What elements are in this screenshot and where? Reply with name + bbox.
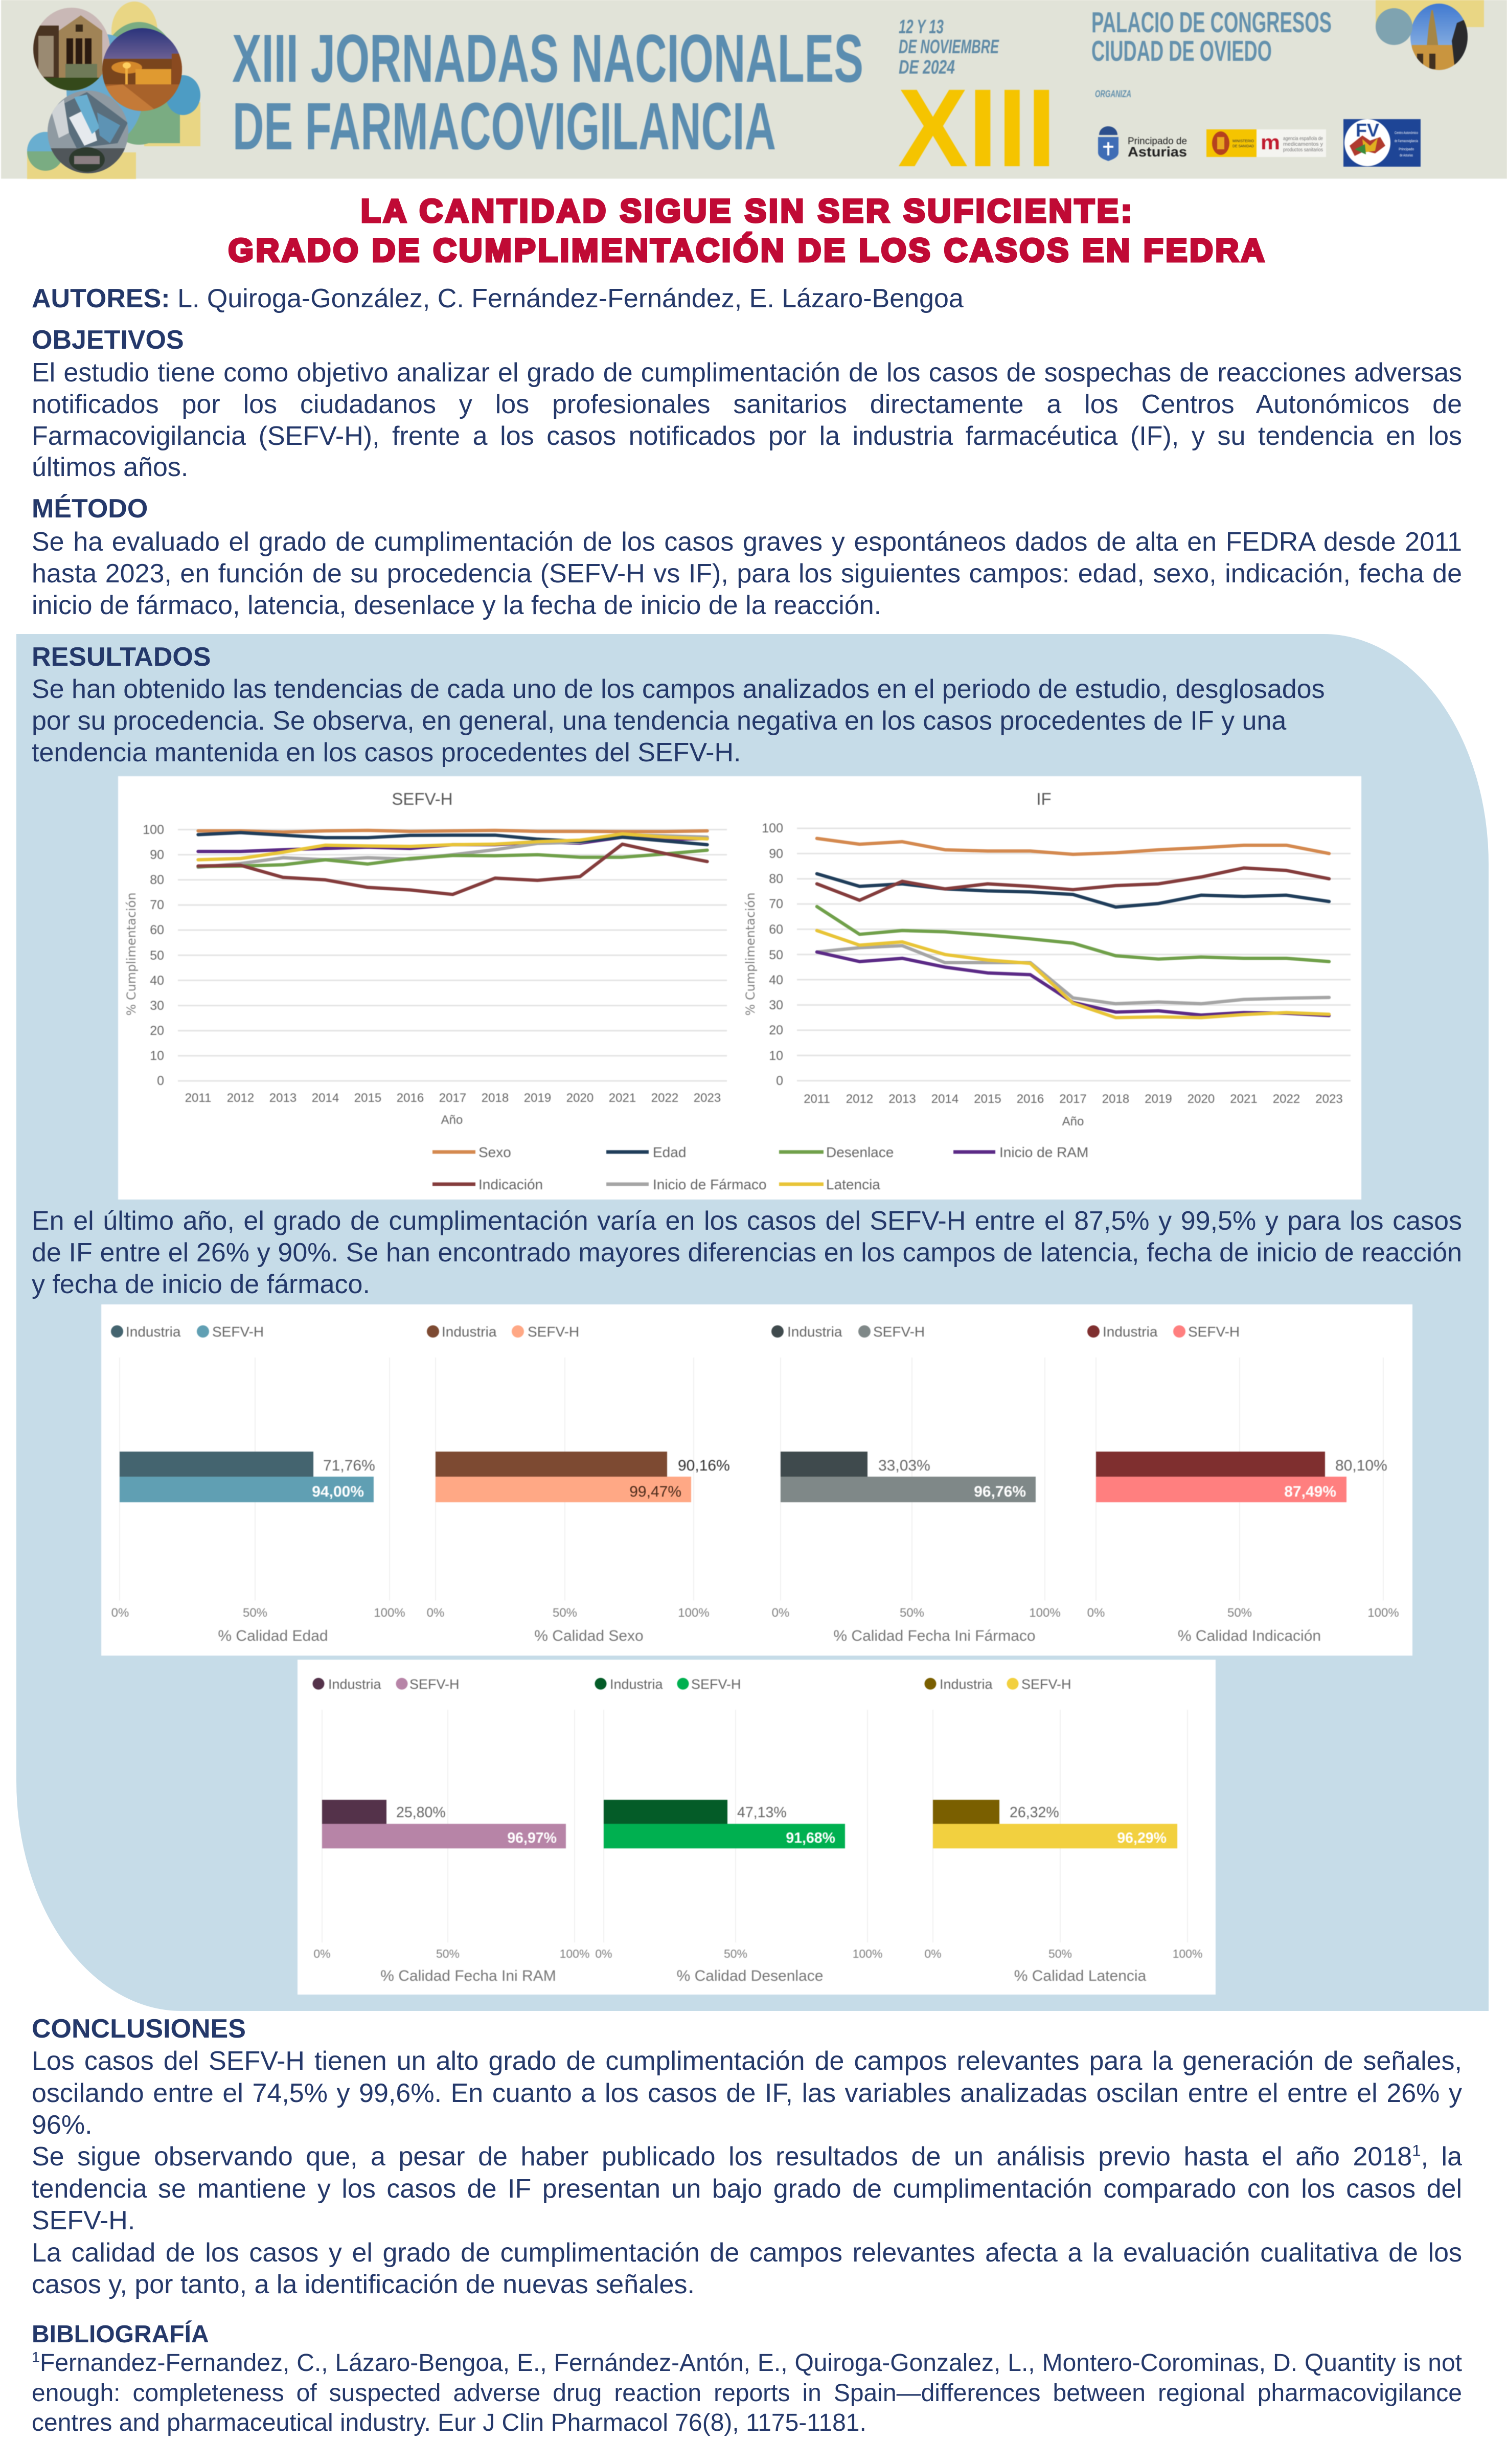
title: LA CANTIDAD SIGUE SIN SER SUFICIENTE:: [361, 193, 1134, 229]
heading: conclusiones: CONCLUSIONES: [32, 2014, 246, 2044]
line chart: IF: 2021: [1230, 1092, 1258, 1106]
right decorative photo: [1376, 0, 1484, 72]
bar chart: % Calidad Desenlace: 50%: [724, 1947, 747, 1960]
line chart: IF: IF: [1036, 789, 1052, 808]
bar chart: % Calidad Desenlace: 47,13%: [737, 1804, 787, 1821]
bar chart: % Calidad Fecha Ini RAM: 50%: [436, 1947, 460, 1960]
bar charts panel: upper row: [101, 1304, 1413, 1656]
bar charts panel: lower row: [298, 1660, 1216, 1995]
line chart legend: Sexo: [478, 1144, 511, 1160]
line chart: SEFV-H: SEFV-H: [392, 789, 453, 808]
section: conclusiones: [32, 2013, 1462, 2300]
text: conclusiones: SEFV-H.: [32, 2206, 135, 2235]
bar chart: % Calidad Fecha Ini RAM: Industria: [328, 1677, 382, 1692]
line chart: SEFV-H: % Cumplimentación: [124, 893, 139, 1015]
bar chart: % Calidad Sexo: [427, 1324, 730, 1644]
text: conclusiones: oscilando entre el 74,5% y 99,6%. En cuanto a los casos de IF, las variables analizadas oscilan entre el entre el 26% y: [32, 2078, 1462, 2108]
bar chart: % Calidad Edad: 71,76%: [323, 1457, 375, 1474]
line chart: SEFV-H: 40: [150, 974, 164, 988]
bar chart: % Calidad Latencia: Industria: [940, 1677, 993, 1692]
line chart: SEFV-H: 30: [150, 999, 164, 1013]
bar chart: % Calidad Edad: 94,00%: [312, 1483, 364, 1500]
heading: método: MÉTODO: [32, 494, 148, 524]
line charts panel: SEFV-H and IF trends: [118, 776, 1362, 1200]
bar chart: % Calidad Fecha Ini Fármaco: 50%: [900, 1606, 924, 1620]
main heading: XIII Jornadas Nacionales de Farmacovigilancia: [232, 21, 863, 164]
bar chart: % Calidad Indicación: % Calidad Indicación: [1178, 1627, 1321, 1644]
bar chart: % Calidad Fecha Ini Fármaco: SEFV-H: [873, 1324, 925, 1340]
line chart legend: Edad: [653, 1144, 686, 1160]
bar chart: % Calidad Desenlace: 0%: [595, 1947, 612, 1960]
bar chart: % Calidad Desenlace: [595, 1677, 882, 1984]
line chart: IF: 2014: [931, 1092, 958, 1106]
line chart: IF: 2011: [804, 1092, 830, 1106]
bar chart: % Calidad Fecha Ini RAM: % Calidad Fecha Ini RAM: [380, 1968, 556, 1984]
bar chart: % Calidad Indicación: 100%: [1367, 1606, 1399, 1620]
bar chart: % Calidad Edad: 0%: [111, 1606, 129, 1620]
main heading: XIII Jornadas Nacionales de Farmacovigilancia: XIII JORNADAS NACIONALES: [232, 21, 863, 97]
section: objetivos: [32, 325, 1462, 482]
venue: [1091, 6, 1332, 67]
line chart: IF: 50: [769, 948, 783, 962]
bar chart: % Calidad Edad: Industria: [126, 1324, 181, 1340]
venue: PALACIO DE CONGRESOS: [1091, 6, 1332, 39]
line chart: IF: 2023: [1315, 1092, 1343, 1106]
bar chart: % Calidad Latencia: [924, 1677, 1202, 1984]
section: método: [32, 494, 1462, 620]
title: GRADO DE CUMPLIMENTACIÓN DE LOS CASOS EN FEDRA: [229, 233, 1267, 268]
logo: Principado de Asturias: Asturias: [1128, 144, 1187, 160]
bar chart: % Calidad Latencia: 96,29%: [1117, 1830, 1167, 1846]
bar chart: % Calidad Latencia: 50%: [1048, 1947, 1072, 1960]
text: conclusiones: 96%.: [32, 2110, 93, 2140]
line chart legend: Inicio de RAM: [999, 1144, 1088, 1160]
authors: AUTORES: L. Quiroga-González, C. Fernández-Fernández, E. Lázaro-Bengoa: [32, 284, 964, 313]
title: [228, 193, 1267, 268]
bar chart: % Calidad Fecha Ini RAM: 100%: [560, 1947, 589, 1960]
bar chart: % Calidad Indicación: 0%: [1087, 1606, 1105, 1620]
bar chart: % Calidad Sexo: 50%: [553, 1606, 577, 1620]
line chart: SEFV-H: 0: [157, 1074, 164, 1088]
line chart legend: Inicio de Fármaco: [653, 1177, 767, 1192]
logo: Ministerio de Sanidad and AEMPS: medicamentos y: [1283, 142, 1323, 147]
logo: FV: Centro Autonómico: [1395, 131, 1418, 135]
logo: Ministerio de Sanidad and AEMPS: productos sanitarios: [1283, 147, 1323, 153]
line chart: IF: 2015: [974, 1092, 1001, 1106]
bar chart: % Calidad Fecha Ini Fármaco: 96,76%: [974, 1483, 1026, 1500]
bar chart: % Calidad Indicación: 87,49%: [1284, 1483, 1336, 1500]
bar chart: % Calidad Edad: % Calidad Edad: [218, 1627, 328, 1644]
text: resultados intro: [32, 674, 1325, 767]
line chart: IF: 2016: [1017, 1092, 1044, 1106]
line chart: SEFV-H: 2014: [312, 1091, 339, 1105]
line chart: IF: 2018: [1102, 1092, 1129, 1106]
bar chart: % Calidad Edad: 100%: [374, 1606, 405, 1620]
bar chart: % Calidad Sexo: SEFV-H: [528, 1324, 579, 1340]
line chart: SEFV-H: 2012: [227, 1091, 254, 1105]
logo: Ministerio de Sanidad and AEMPS: m: [1261, 131, 1280, 154]
line chart: IF: 70: [769, 897, 783, 911]
bar chart: % Calidad Latencia: % Calidad Latencia: [1014, 1968, 1147, 1984]
bar chart: % Calidad Fecha Ini Fármaco: 0%: [772, 1606, 789, 1620]
text: objetivos: [32, 358, 1462, 482]
bar chart: % Calidad Fecha Ini Fármaco: 33,03%: [878, 1457, 930, 1474]
bar chart: % Calidad Indicación: SEFV-H: [1188, 1324, 1240, 1340]
bar chart: % Calidad Indicación: Industria: [1103, 1324, 1158, 1340]
line chart: SEFV-H: 2020: [566, 1091, 593, 1105]
logo: FV: Principado: [1399, 148, 1414, 151]
bar chart: % Calidad Latencia: 26,32%: [1010, 1804, 1059, 1821]
text: método: [32, 527, 1462, 620]
text: reference: enough: completeness of suspected adverse drug reaction reports in Spain—differences between regional pharmacovigilance: [32, 2380, 1462, 2407]
section: bibliografía: [32, 2319, 1462, 2439]
text: objetivos: Farmacovigilancia (SEFV-H), frente a los casos notificados por la industria farmacéutica (IF), y su tendencia en los: [32, 421, 1462, 451]
dates: DE NOVIEMBRE: [899, 36, 999, 58]
bar chart: % Calidad Desenlace: SEFV-H: [691, 1677, 741, 1692]
bar chart: % Calidad Sexo: 100%: [678, 1606, 710, 1620]
bar chart: % Calidad Desenlace: Industria: [610, 1677, 664, 1692]
logo: FV: de Farmacovigilancia: [1395, 140, 1418, 143]
text: resultados last year: En el último año, el grado de cumplimentación varía en los casos del SEFV-H entre el 87,5% y 99,5% y para los casos: [32, 1206, 1462, 1236]
bar chart: % Calidad Indicación: 50%: [1227, 1606, 1252, 1620]
line chart: IF: 2020: [1188, 1092, 1215, 1106]
line chart: SEFV-H: 2017: [439, 1091, 466, 1105]
bar chart: % Calidad Edad: [111, 1324, 405, 1644]
logo: FV: de Asturias: [1400, 154, 1413, 157]
line chart: SEFV-H: 2018: [482, 1091, 509, 1105]
bar chart: % Calidad Fecha Ini Fármaco: 100%: [1029, 1606, 1061, 1620]
bar chart: % Calidad Edad: 50%: [243, 1606, 267, 1620]
heading: resultados: RESULTADOS: [32, 642, 211, 672]
dates: [899, 16, 999, 78]
line chart: IF: 40: [769, 973, 783, 987]
text: conclusiones: La calidad de los casos y el grado de cumplimentación de campos relevantes afecta a la evaluación cualitativa de los: [32, 2238, 1462, 2268]
heading: objetivos: OBJETIVOS: [32, 325, 184, 355]
line chart legend: [432, 1144, 1088, 1192]
text: método: hasta 2023, en función de su procedencia (SEFV-H vs IF), para los siguientes campos: edad, sexo, indicación, fecha de: [32, 559, 1462, 589]
line chart: SEFV-H: 2016: [397, 1091, 424, 1105]
logo: Principado de Asturias: [1098, 126, 1187, 161]
section: resultados intro: [32, 642, 1325, 767]
bar chart: % Calidad Sexo: Industria: [442, 1324, 497, 1340]
line chart: SEFV-H: 2022: [651, 1091, 678, 1105]
text: objetivos: últimos años.: [32, 453, 188, 482]
line chart: IF: 30: [769, 998, 783, 1012]
bar chart: % Calidad Fecha Ini Fármaco: Industria: [787, 1324, 842, 1340]
text: método: inicio de fármaco, latencia, desenlace y la fecha de inicio de la reacción.: [32, 591, 881, 620]
line chart: IF: 100: [762, 821, 783, 835]
text: reference: centres and pharmaceutical industry. Eur J Clin Pharmacol 76(8), 1175-1181.: [32, 2409, 866, 2436]
line chart: SEFV-H: 50: [150, 948, 164, 963]
bar chart: % Calidad Fecha Ini RAM: 25,80%: [396, 1804, 446, 1821]
text: resultados last year: [32, 1206, 1462, 1299]
line chart legend: Indicación: [478, 1177, 543, 1192]
bar chart: % Calidad Sexo: % Calidad Sexo: [534, 1627, 644, 1644]
bar chart: % Calidad Sexo: 99,47%: [629, 1483, 681, 1500]
logo: Ministerio de Sanidad and AEMPS: [1206, 129, 1326, 157]
bar chart: % Calidad Latencia: 0%: [924, 1947, 942, 1960]
bar chart: % Calidad Sexo: 0%: [427, 1606, 444, 1620]
left decorative photo collage: [27, 2, 200, 179]
text: reference: [32, 2347, 1462, 2439]
line chart: IF: Año: [1062, 1115, 1084, 1128]
text: resultados intro: tendencia mantenida en los casos procedentes del SEFV-H.: [32, 738, 741, 767]
logo: FV: [1343, 119, 1421, 167]
heading: bibliografía: BIBLIOGRAFÍA: [32, 2321, 209, 2348]
line chart: IF: 2013: [888, 1092, 916, 1106]
line chart: IF: 0: [776, 1074, 783, 1088]
dates: DE 2024: [899, 57, 955, 78]
line chart: SEFV-H: 2019: [524, 1091, 551, 1105]
text: reference: 1Fernandez-Fernandez, C., Lázaro-Bengoa, E., Fernández-Antón, E., Quiroga-Gonzalez, L., Montero-Corominas, D. Quantity is not: [32, 2349, 1462, 2377]
line chart: IF: 10: [769, 1049, 783, 1063]
bar chart: % Calidad Desenlace: % Calidad Desenlace: [677, 1968, 823, 1984]
bar chart: % Calidad Fecha Ini RAM: SEFV-H: [409, 1677, 460, 1692]
logo: Ministerio de Sanidad and AEMPS: DE SANIDAD: [1232, 145, 1254, 148]
logo: Ministerio de Sanidad and AEMPS: agencia española de: [1283, 136, 1323, 142]
line chart: SEFV-H: 2023: [694, 1091, 721, 1105]
text: objetivos: El estudio tiene como objetivo analizar el grado de cumplimentación de los casos de sospechas de reacciones adversas: [32, 358, 1462, 388]
line chart: IF: 2012: [846, 1092, 873, 1106]
logo: Principado de Asturias: Principado de: [1128, 136, 1187, 147]
text: objetivos: notificados por los ciudadanos y los profesionales sanitarios directamente a los Centros Autonómicos de: [32, 390, 1462, 419]
line chart: SEFV-H: 2013: [269, 1091, 296, 1105]
line chart: SEFV-H: 70: [150, 898, 164, 912]
logo: FV: FV: [1356, 120, 1379, 141]
line chart: SEFV-H: 90: [150, 848, 164, 862]
bar chart: % Calidad Indicación: 80,10%: [1335, 1457, 1387, 1474]
text: resultados intro: Se han obtenido las tendencias de cada uno de los campos analizados en el periodo de estudio, desglosados: [32, 674, 1325, 704]
header banner: [1, 0, 1507, 179]
venue: CIUDAD DE OVIEDO: [1091, 35, 1272, 67]
dates: 12 Y 13: [899, 16, 944, 38]
main heading: XIII Jornadas Nacionales de Farmacovigilancia: DE FARMACOVIGILANCIA: [233, 88, 776, 164]
line chart: SEFV-H: 10: [150, 1049, 164, 1063]
bar chart: % Calidad Desenlace: 100%: [853, 1947, 882, 1960]
text: conclusiones: Se sigue observando que, a pesar de haber publicado los resultados de un análisis previo hasta el año 20181, la: [32, 2142, 1462, 2172]
line chart: SEFV-H: 60: [150, 923, 164, 937]
bar chart: % Calidad Indicación: [1087, 1324, 1399, 1644]
bar chart: % Calidad Fecha Ini RAM: 0%: [313, 1947, 331, 1960]
line chart: IF: 2022: [1273, 1092, 1300, 1106]
line chart legend: Latencia: [826, 1177, 880, 1192]
text: conclusiones: casos y, por tanto, a la identificación de nuevas señales.: [32, 2270, 695, 2299]
bar chart: % Calidad Latencia: SEFV-H: [1021, 1677, 1071, 1692]
text: método: Se ha evaluado el grado de cumplimentación de los casos graves y espontáneos dados de alta en FEDRA desde 2011: [32, 527, 1462, 557]
line chart: SEFV-H: Año: [441, 1113, 463, 1127]
text: resultados last year: de IF entre el 26% y 90%. Se han encontrado mayores diferencias en los campos de latencia, fecha de inicio de reacción: [32, 1238, 1462, 1268]
bar chart: % Calidad Sexo: 90,16%: [678, 1457, 730, 1474]
line chart: SEFV-H: 2015: [354, 1091, 381, 1105]
bar chart: % Calidad Desenlace: 91,68%: [786, 1830, 835, 1846]
line chart: SEFV-H: 2021: [609, 1091, 636, 1105]
line chart: IF: [743, 789, 1351, 1128]
line chart legend: Desenlace: [826, 1144, 894, 1160]
line chart: IF: 90: [769, 847, 783, 861]
line chart: SEFV-H: 100: [143, 823, 164, 837]
text: conclusiones: [32, 2045, 1462, 2300]
text: resultados last year: y fecha de inicio de fármaco.: [32, 1270, 370, 1299]
line chart: IF: 60: [769, 922, 783, 937]
bar chart: % Calidad Fecha Ini Fármaco: % Calidad Fecha Ini Fármaco: [833, 1627, 1036, 1644]
line chart: SEFV-H: 20: [150, 1024, 164, 1038]
line chart: SEFV-H: [124, 789, 727, 1127]
bar chart: % Calidad Latencia: 100%: [1173, 1947, 1202, 1960]
line chart: SEFV-H: 80: [150, 873, 164, 887]
text: resultados intro: por su procedencia. Se observa, en general, una tendencia negativa en los casos procedentes de IF y una: [32, 706, 1286, 736]
line chart: IF: 20: [769, 1023, 783, 1037]
panel: resultados background: [16, 634, 1489, 2011]
line chart: IF: 2019: [1145, 1092, 1172, 1106]
organiza label: ORGANIZA: [1095, 89, 1131, 100]
bar chart: % Calidad Edad: SEFV-H: [212, 1324, 264, 1340]
line chart: IF: 80: [769, 872, 783, 886]
line chart: IF: 2017: [1059, 1092, 1087, 1106]
line chart: SEFV-H: 2011: [185, 1091, 211, 1105]
text: conclusiones: Los casos del SEFV-H tienen un alto grado de cumplimentación de campos relevantes para la generación de señales,: [32, 2046, 1462, 2076]
line chart: IF: % Cumplimentación: [743, 893, 758, 1015]
bar chart: % Calidad Fecha Ini Fármaco: [771, 1324, 1061, 1644]
text: conclusiones: tendencia se mantiene y los casos de IF presentan un bajo grado de cumplimentación comparado con los casos del: [32, 2174, 1462, 2204]
bar chart: % Calidad Fecha Ini RAM: [313, 1677, 589, 1984]
bar chart: % Calidad Fecha Ini RAM: 96,97%: [507, 1830, 557, 1846]
logo: Ministerio de Sanidad and AEMPS: MINISTERIO: [1232, 140, 1254, 143]
